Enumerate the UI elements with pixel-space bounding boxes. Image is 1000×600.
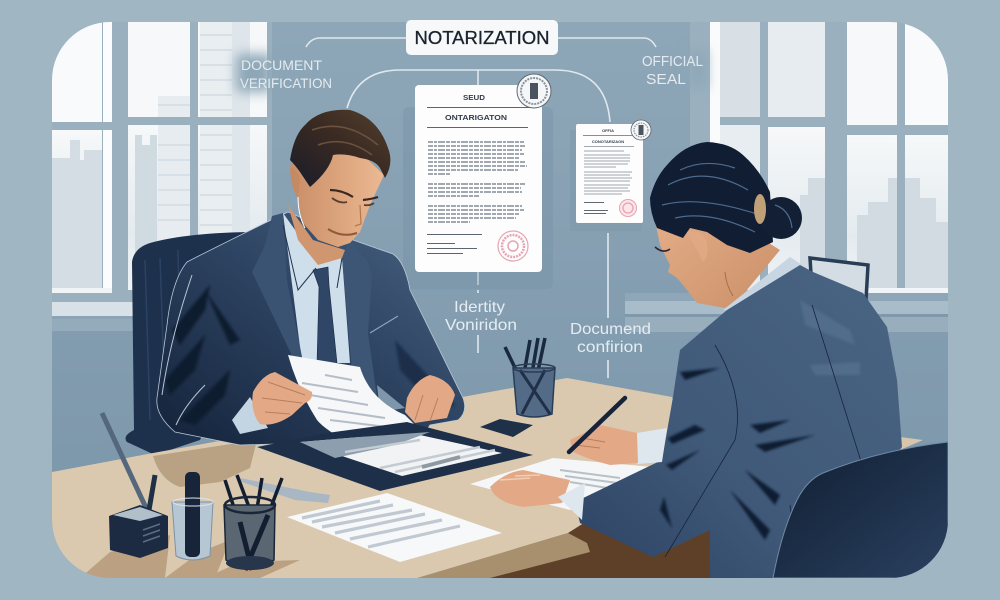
right window xyxy=(625,22,948,332)
woman xyxy=(490,142,902,578)
label: document confirmation: Documend xyxy=(570,321,651,338)
woman's collar xyxy=(723,257,807,312)
woman's chair xyxy=(773,442,948,578)
document: large notarized page: SEUD xyxy=(463,95,485,102)
woman's neck and face xyxy=(654,226,780,308)
label: document confirmation: confirion xyxy=(577,339,643,356)
man's tie xyxy=(313,267,337,363)
stapler xyxy=(240,478,330,503)
label: official seal: SEAL xyxy=(646,72,686,88)
label: document verification: DOCUMENT xyxy=(241,57,322,73)
woman's hair xyxy=(650,142,802,253)
man's collar line xyxy=(283,225,342,290)
desk xyxy=(52,378,923,578)
document: small notarized page: CONOTARIZAON xyxy=(592,139,624,144)
document: small notarized page: OFFIA xyxy=(602,128,614,133)
icon: small portrait stamp xyxy=(631,120,651,140)
man's cuff xyxy=(232,397,268,434)
woman's left hand xyxy=(490,470,570,507)
man's neck and head xyxy=(288,110,390,265)
clipboard with paper xyxy=(257,422,533,491)
label: document verification: VERIFICATION xyxy=(240,75,332,91)
icon: small pink seal xyxy=(620,200,636,216)
woman's ear xyxy=(687,231,707,262)
document: large notarized page: ONTARIGATON xyxy=(445,113,507,122)
document on desk xyxy=(287,493,502,562)
document shadow xyxy=(403,107,553,289)
gap between arm and torso xyxy=(377,385,405,412)
monitor frame on sill xyxy=(810,258,868,300)
man's lapels xyxy=(252,213,377,397)
woman's writing cuff xyxy=(637,428,667,464)
paper held by man xyxy=(288,355,414,432)
man's shirt xyxy=(283,213,350,363)
man's left hand xyxy=(252,372,312,425)
jacket fold marks xyxy=(660,300,870,578)
icon: round portrait stamp xyxy=(517,74,551,108)
pen xyxy=(569,398,625,452)
icon: pink seal xyxy=(498,231,528,261)
label: official seal: OFFICIAL xyxy=(642,54,703,70)
man's chair xyxy=(126,232,246,454)
woman's left cuff xyxy=(558,483,585,520)
title box: NOTARIZATION xyxy=(414,28,550,48)
diagram connector lines xyxy=(306,38,656,378)
woman's writing hand xyxy=(570,425,638,465)
title box xyxy=(406,20,558,55)
wall patches behind labels xyxy=(236,50,706,92)
woman's jacket xyxy=(575,265,902,578)
document: small notarized page xyxy=(576,120,652,223)
left window xyxy=(52,22,272,331)
label: identity: Voniridon xyxy=(445,317,517,334)
label: official seal xyxy=(642,56,703,84)
glass with marker xyxy=(172,472,213,560)
label: identity: Idertity xyxy=(454,299,505,316)
man's right hand xyxy=(405,375,455,423)
pen block xyxy=(102,413,168,558)
paper under woman's hand xyxy=(470,458,653,510)
label: document verification xyxy=(240,60,331,88)
pen holder on desk xyxy=(505,338,555,417)
man's jacket xyxy=(157,212,465,445)
document: large notarized page xyxy=(415,74,551,272)
man's hair xyxy=(290,110,390,187)
label: document confirmation xyxy=(571,322,650,352)
phone xyxy=(480,419,533,437)
label: identity xyxy=(445,300,516,330)
man xyxy=(157,110,465,445)
mesh pen cup xyxy=(224,475,282,570)
jacket fold marks xyxy=(162,275,455,425)
